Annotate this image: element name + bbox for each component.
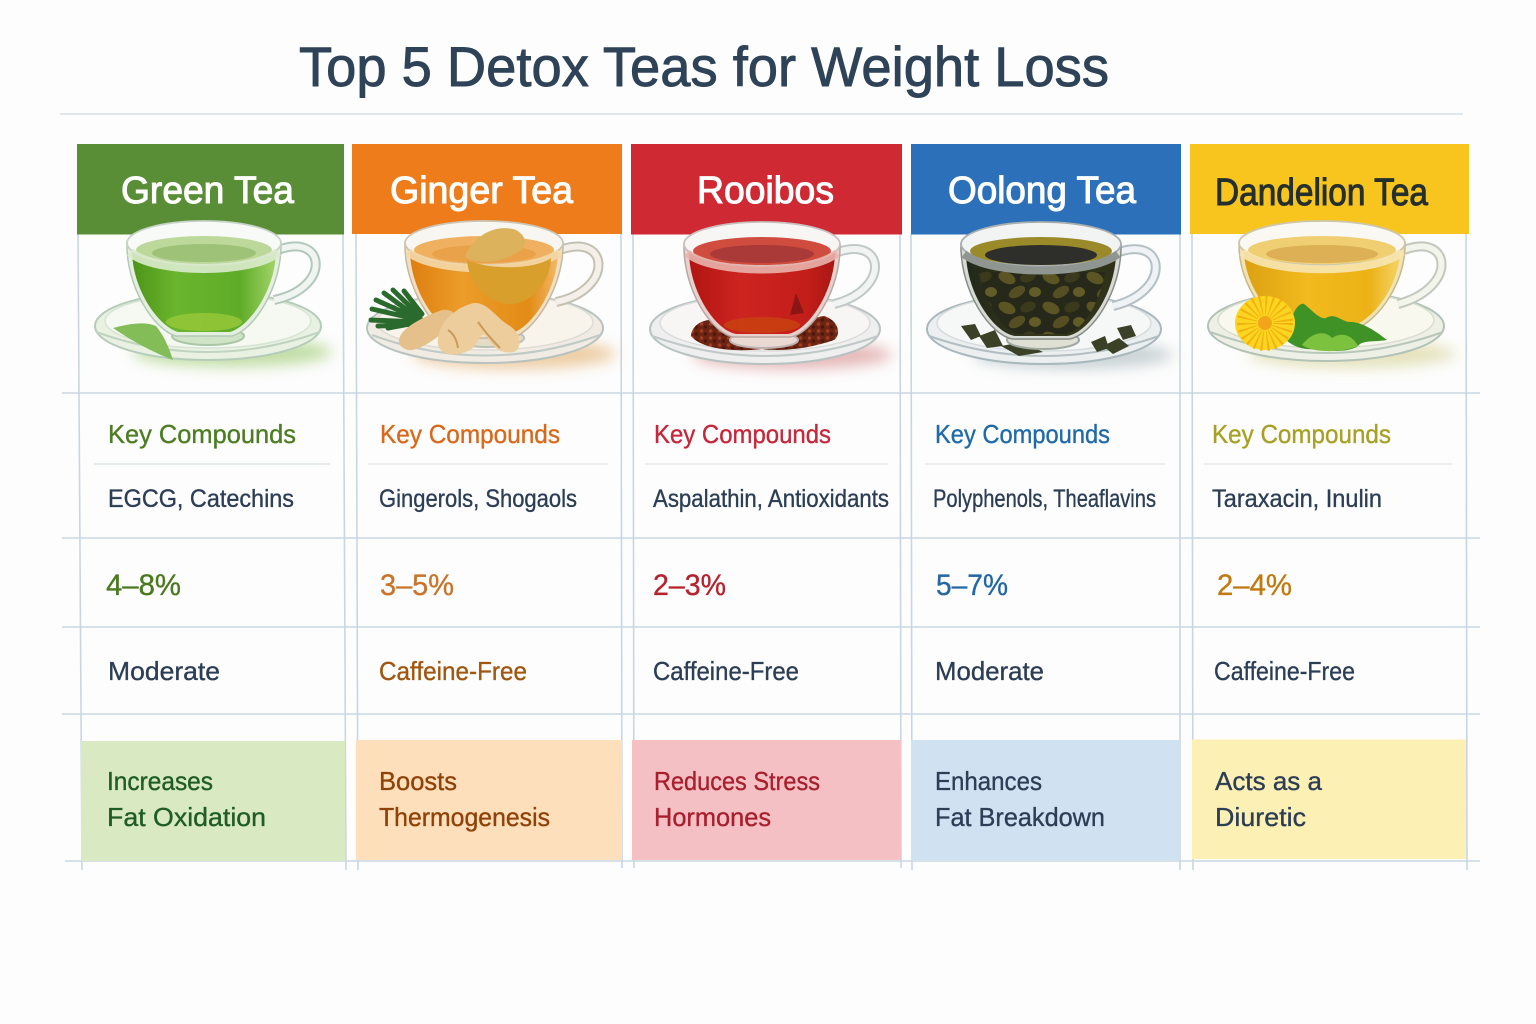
caffeine level: Caffeine-Free xyxy=(653,656,799,686)
icon: ginger and herb garnish xyxy=(371,290,520,355)
benefit box: Hormones xyxy=(654,802,771,832)
header: Green Tea: Green Tea xyxy=(121,170,295,212)
benefit box: Thermogenesis xyxy=(379,802,550,832)
header: Rooibos xyxy=(631,144,902,234)
icon: ginger tea cup xyxy=(367,221,616,369)
header: Rooibos: Rooibos xyxy=(697,170,834,212)
benefit box xyxy=(1192,740,1466,859)
benefit box: Reduces Stress xyxy=(654,766,820,796)
title: Top 5 Detox Teas for Weight Loss xyxy=(299,35,1109,98)
caffeine level: Moderate xyxy=(935,656,1044,686)
benefit box: Diuretic xyxy=(1215,802,1306,832)
percentage: 3–5% xyxy=(380,569,454,602)
panel: Ginger Tea xyxy=(352,144,622,860)
header: Green Tea xyxy=(77,144,344,234)
key compounds value: Gingerols, Shogaols xyxy=(379,485,577,513)
rooibos leaves pile xyxy=(691,316,838,350)
label: Key Compounds: Key Compounds xyxy=(654,419,831,449)
key compounds value: Taraxacin, Inulin xyxy=(1212,485,1382,513)
benefit box: Fat Breakdown xyxy=(935,802,1105,832)
header: Ginger Tea: Ginger Tea xyxy=(390,170,574,212)
label: Key Compounds: Key Compounds xyxy=(108,419,296,449)
percentage: 5–7% xyxy=(936,569,1008,602)
benefit box xyxy=(632,740,901,860)
header: Dandelion Tea: Dandelion Tea xyxy=(1215,172,1429,214)
benefit box: Fat Oxidation xyxy=(107,802,266,832)
percentage: 2–3% xyxy=(653,569,726,602)
benefit box: Enhances xyxy=(935,766,1042,796)
caffeine level: Moderate xyxy=(108,656,220,686)
icon: dandelion flower and leaves xyxy=(1235,296,1387,351)
panel: Green Tea xyxy=(77,144,345,861)
caffeine level: Caffeine-Free xyxy=(379,656,527,686)
header: Dandelion Tea xyxy=(1190,144,1469,234)
icon: green tea cup xyxy=(95,221,332,367)
header: Ginger Tea xyxy=(352,144,622,234)
caffeine level: Caffeine-Free xyxy=(1214,656,1355,686)
percentage: 4–8% xyxy=(106,569,181,602)
label: Key Compounds: Key Compounds xyxy=(935,419,1110,449)
key compounds value: Polyphenols, Theaflavins xyxy=(933,485,1156,513)
header: Oolong Tea: Oolong Tea xyxy=(948,170,1137,212)
header: Oolong Tea xyxy=(911,144,1181,234)
icon: oolong cup xyxy=(927,222,1173,369)
benefit box xyxy=(81,741,345,861)
key compounds value: EGCG, Catechins xyxy=(108,485,294,513)
benefit box: Increases xyxy=(107,766,213,796)
benefit box: Acts as a xyxy=(1215,766,1323,796)
benefit box: Boosts xyxy=(379,766,457,796)
oolong leaves pile xyxy=(961,324,1136,356)
icon: dandelion cup xyxy=(1208,221,1456,368)
panel: Rooibos xyxy=(631,144,902,860)
panel: Dandelion Tea xyxy=(1190,144,1469,859)
panel: Oolong Tea xyxy=(911,144,1181,860)
percentage: 2–4% xyxy=(1217,569,1292,602)
icon: rooibos cup xyxy=(650,222,892,369)
benefit box xyxy=(911,740,1180,860)
benefit box xyxy=(356,740,622,860)
key compounds value: Aspalathin, Antioxidants xyxy=(653,485,889,513)
label: Key Compounds: Key Compounds xyxy=(1212,419,1391,449)
label: Key Compounds: Key Compounds xyxy=(380,419,560,449)
